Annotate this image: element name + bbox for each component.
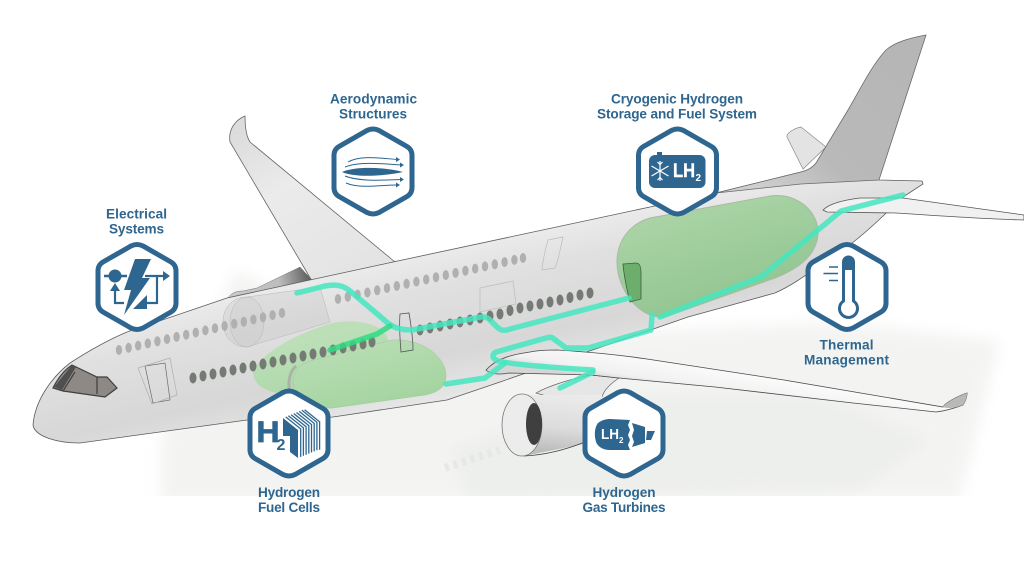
- hydrogen tank: forward front-row: [293, 340, 446, 408]
- label: Electrical Systems: Systems: [109, 222, 164, 236]
- icon: aerodynamic airfoil: [334, 129, 412, 214]
- mid door: [400, 313, 413, 352]
- icon: hydrogen fuel cells: [250, 391, 328, 476]
- hydrogen tank: rear: [617, 196, 818, 317]
- label: Electrical Systems: Electrical: [106, 206, 167, 222]
- icon: cryogenic LH2 tank: 2: [696, 173, 702, 184]
- icon: hydrogen fuel cells: 2: [276, 437, 286, 454]
- icon: thermometer: [808, 244, 886, 330]
- far engine nacelle: [228, 267, 312, 298]
- label: Hydrogen Fuel Cells: Hydrogen: [258, 485, 320, 500]
- ground shadow: [160, 270, 1000, 505]
- label: Aerodynamic Structures: Aerodynamic: [330, 92, 417, 106]
- cockpit windows: [53, 365, 117, 397]
- label: Aerodynamic Structures: [330, 92, 417, 122]
- label: Cryogenic Hydrogen Storage and Fuel System: Storage and Fuel System: [597, 106, 757, 122]
- icon: hydrogen gas turbine: LH: [601, 426, 619, 443]
- label: Cryogenic Hydrogen Storage and Fuel System: Cryogenic Hydrogen: [611, 92, 743, 106]
- label: Thermal Management: Thermal: [820, 338, 874, 352]
- rear door inside tank: [623, 263, 641, 302]
- label: Thermal Management: Management: [804, 352, 889, 368]
- near engine: [502, 375, 619, 456]
- label: Hydrogen Fuel Cells: [258, 485, 320, 515]
- icon: cryogenic LH2 tank: [638, 129, 716, 214]
- vertical fin: [716, 35, 926, 193]
- hydrogen tank: forward rear-row: [253, 321, 388, 393]
- icon: hydrogen fuel cells: H: [256, 416, 280, 449]
- far horizontal stabilizer: [787, 127, 826, 169]
- upper window row: [116, 253, 526, 355]
- label: Hydrogen Gas Turbines: Gas Turbines: [582, 500, 666, 515]
- ghost far engine: [223, 287, 330, 347]
- near horizontal stabilizer: [823, 198, 1024, 220]
- near wing: [486, 350, 967, 412]
- fuselage: [33, 172, 923, 443]
- engine edge between tanks: [289, 366, 296, 395]
- label: Hydrogen Gas Turbines: Hydrogen: [592, 485, 656, 500]
- label: Electrical Systems: [106, 206, 167, 236]
- label: Thermal Management: [804, 338, 889, 368]
- front door: [138, 358, 177, 404]
- far doors: [480, 237, 563, 312]
- icon: electrical systems: [98, 244, 176, 330]
- icon: hydrogen gas turbine: 2: [619, 436, 624, 445]
- icon: hydrogen gas turbine: [585, 391, 663, 476]
- far wing: [230, 116, 395, 281]
- lower window row: [190, 288, 594, 384]
- label: Hydrogen Gas Turbines: [582, 485, 666, 515]
- label: Hydrogen Fuel Cells: Fuel Cells: [258, 500, 320, 515]
- icon: cryogenic LH2 tank: LH: [673, 161, 695, 182]
- label: Aerodynamic Structures: Structures: [339, 106, 407, 122]
- label: Cryogenic Hydrogen Storage and Fuel System: [597, 92, 757, 122]
- hydrogen fuel lines: [297, 195, 903, 388]
